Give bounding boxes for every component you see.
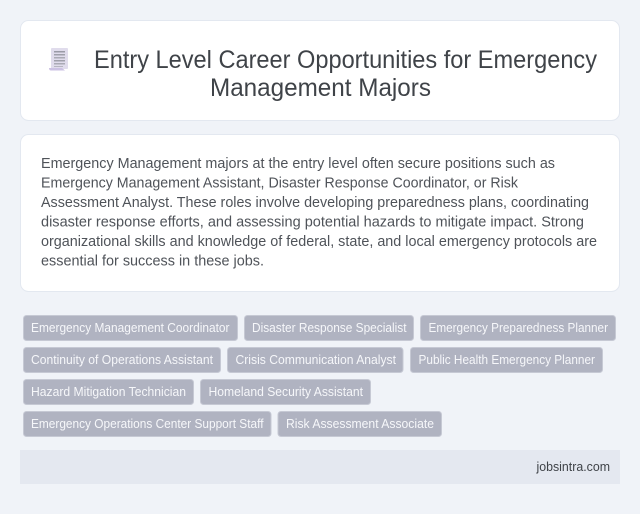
tag: Risk Assessment Associate: [286, 417, 434, 431]
tag: Public Health Emergency Planner: [418, 353, 595, 367]
title: Management Majors: [210, 74, 431, 102]
title: [94, 46, 597, 102]
panel: description: [20, 134, 620, 292]
text block: description: [41, 155, 597, 270]
tag: [278, 412, 442, 436]
tag: [244, 316, 414, 340]
tag: [24, 412, 271, 436]
tag: [228, 348, 403, 372]
tag: Emergency Operations Center Support Staff: [31, 417, 264, 431]
text block: description: essential for success in these jobs.: [41, 252, 264, 270]
tag: Crisis Communication Analyst: [236, 353, 396, 367]
text block: description: organizational skills and knowledge of federal, state, and local emergency protocols are: [41, 233, 597, 250]
tag: Hazard Mitigation Technician: [31, 385, 186, 399]
tags: [24, 316, 616, 436]
tag: [200, 380, 370, 404]
text block: description: disaster response efforts, and assessing potential hazards to mitigate impact. Strong: [41, 214, 584, 230]
footer: [20, 450, 620, 484]
title: Entry Level Career Opportunities for Emergency: [94, 46, 597, 74]
text block: description: Emergency Management Assistant, Disaster Response Coordinator, or Risk: [41, 174, 518, 192]
tag: [420, 316, 616, 340]
tag: Disaster Response Specialist: [252, 321, 407, 335]
tag: [24, 380, 194, 404]
text block: description: Emergency Management majors at the entry level often secure positions such as: [41, 155, 555, 172]
footer: jobsintra.com: [536, 460, 610, 474]
tag: Emergency Management Coordinator: [31, 321, 230, 335]
text block: description: Assessment Analyst. These roles involve developing preparedness plans, coordinating: [41, 194, 589, 211]
tag: Continuity of Operations Assistant: [31, 353, 213, 367]
tag: [410, 348, 602, 372]
icon: document: [49, 48, 68, 70]
panel: header: [20, 20, 620, 120]
tag: [24, 316, 238, 340]
tag: Emergency Preparedness Planner: [428, 321, 608, 335]
tag: [24, 348, 220, 372]
tag: Homeland Security Assistant: [208, 385, 363, 399]
